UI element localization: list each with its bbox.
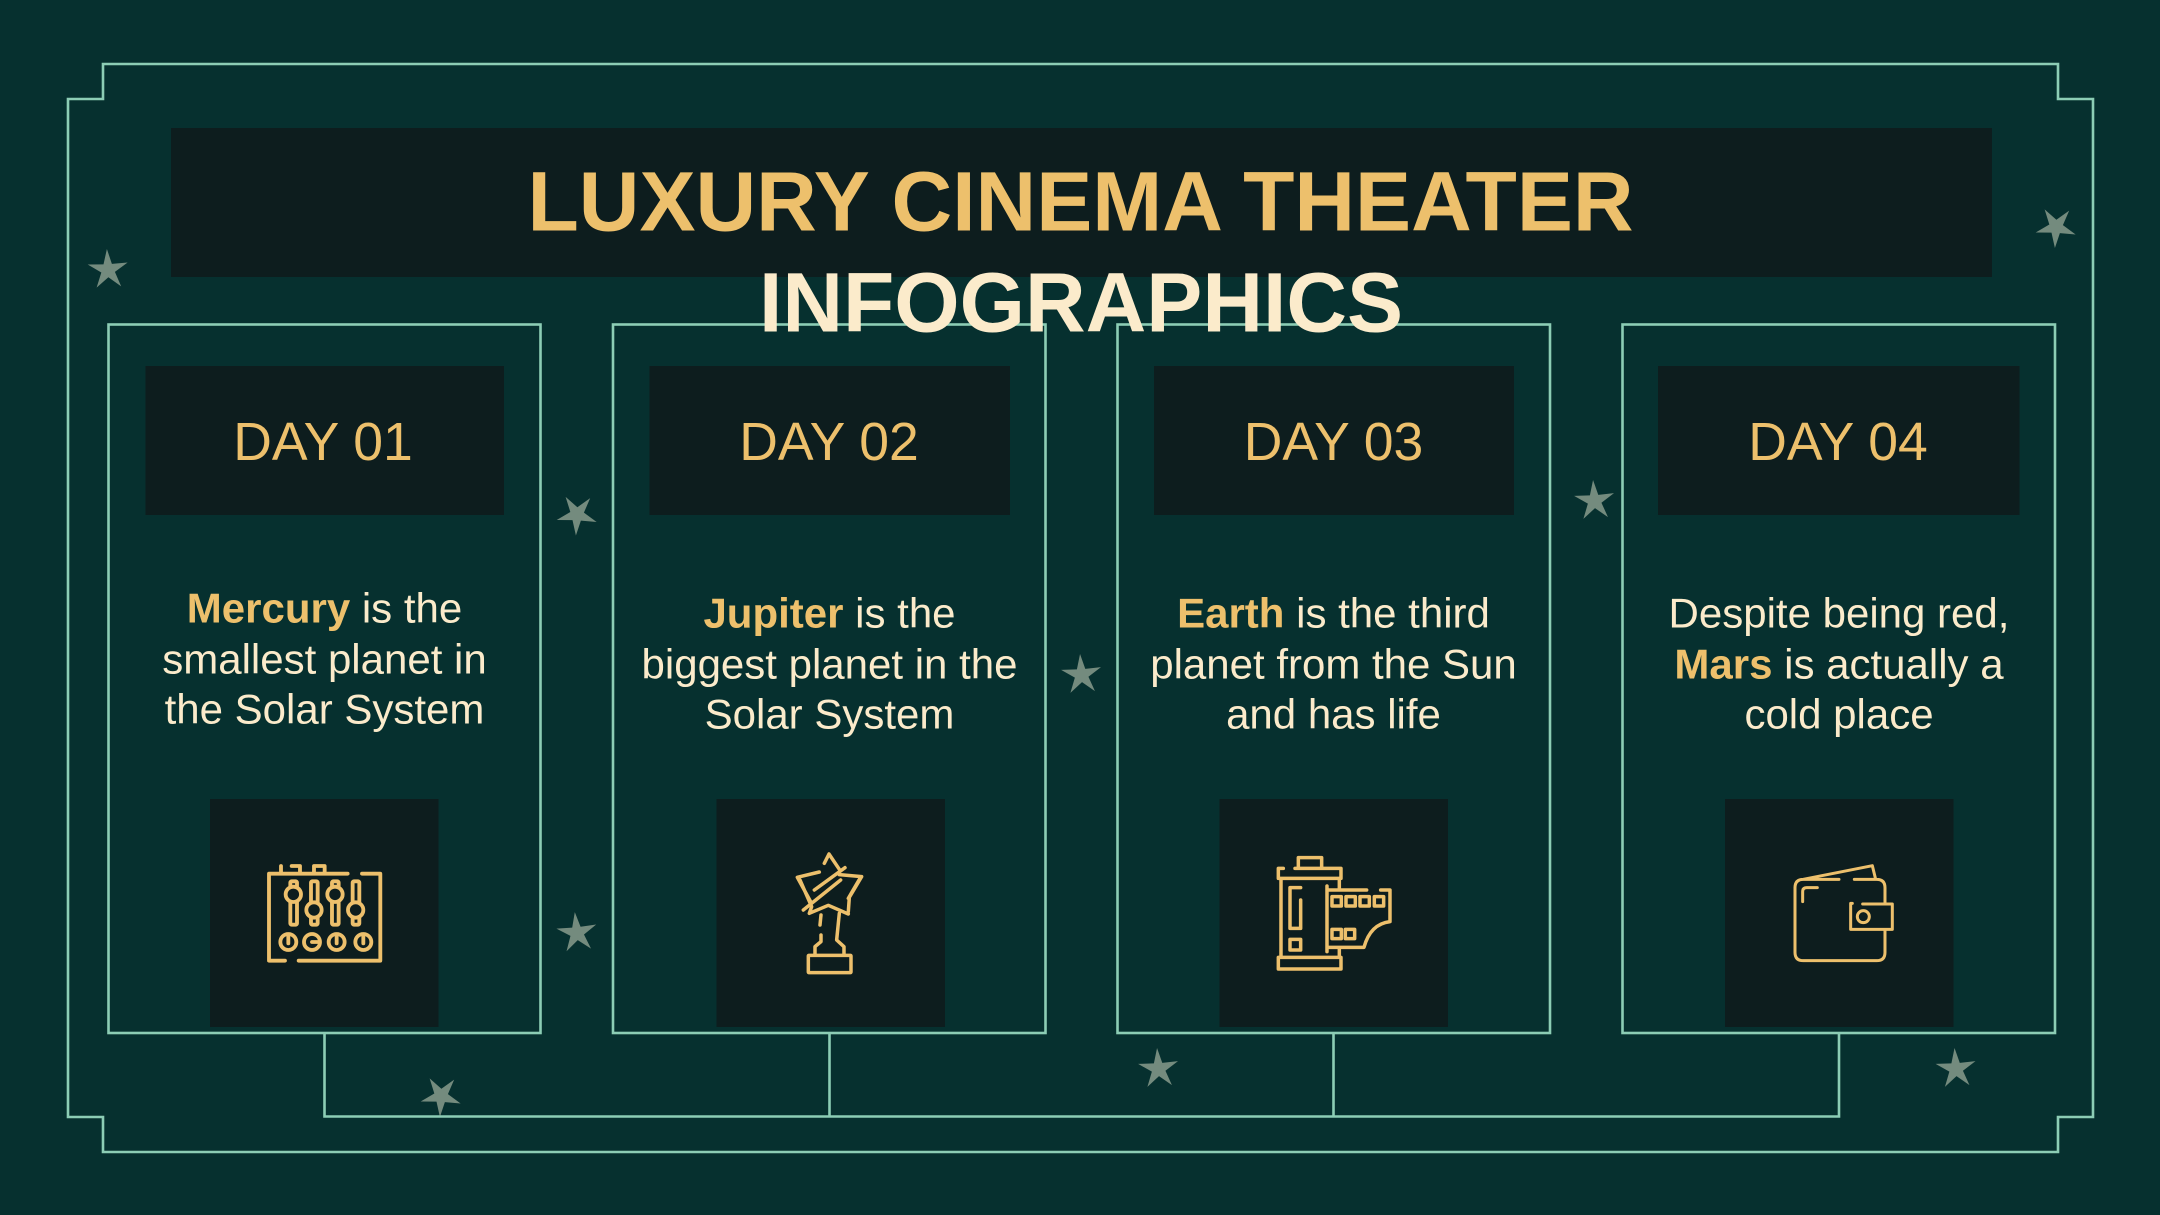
day 04 description: is actually a	[1772, 640, 2004, 688]
day 02 badge	[650, 366, 1010, 515]
title: LUXURY CINEMA THEATER	[527, 154, 1634, 248]
day 01 description: the Solar System	[165, 686, 484, 733]
icon box	[716, 799, 945, 1027]
day 04 label: DAY 04	[1748, 413, 1928, 472]
day 02 label: DAY 02	[739, 413, 919, 472]
panel: day 02	[613, 324, 1046, 1033]
day 03 description: planet from the Sun	[1150, 640, 1517, 688]
day 03 label: DAY 03	[1244, 413, 1423, 472]
day 01 description: smallest planet in	[162, 636, 487, 682]
icon box	[210, 799, 438, 1027]
day 01 description: Mercury	[187, 585, 351, 632]
decorative stars	[87, 209, 2077, 1118]
day 02 description: Solar System	[705, 691, 954, 738]
panel: day 04	[1622, 324, 2055, 1033]
day 03 description: and has life	[1226, 691, 1441, 738]
connector lines	[324, 1033, 1839, 1116]
icon: mixing console	[269, 866, 380, 961]
day 04 description: cold place	[1744, 691, 1934, 738]
day 01 description: is the	[350, 585, 462, 632]
day 02 description: is the	[843, 590, 956, 637]
title: INFOGRAPHICS	[759, 256, 1403, 350]
title bar	[171, 128, 1992, 277]
day 04 description: Despite being red,	[1669, 590, 2009, 637]
icon: film roll	[1278, 858, 1390, 969]
day 04 badge	[1658, 366, 2020, 515]
panel: day 01	[108, 324, 540, 1033]
panel: day 03	[1118, 324, 1550, 1033]
day 04 description: Mars	[1674, 640, 1772, 688]
icon box	[1725, 799, 1954, 1027]
day 03 description: Earth	[1177, 590, 1284, 637]
day 01 badge	[146, 366, 504, 515]
day 01 label: DAY 01	[233, 413, 413, 472]
day 02 description: biggest planet in the	[642, 640, 1017, 688]
day 02 description: Jupiter	[703, 590, 843, 637]
icon: trophy	[797, 854, 862, 973]
day 03 badge	[1154, 366, 1514, 515]
icon: wallet	[1795, 866, 1892, 961]
icon box	[1220, 799, 1448, 1027]
day 03 description: is the third	[1284, 590, 1490, 637]
title	[527, 154, 1634, 350]
